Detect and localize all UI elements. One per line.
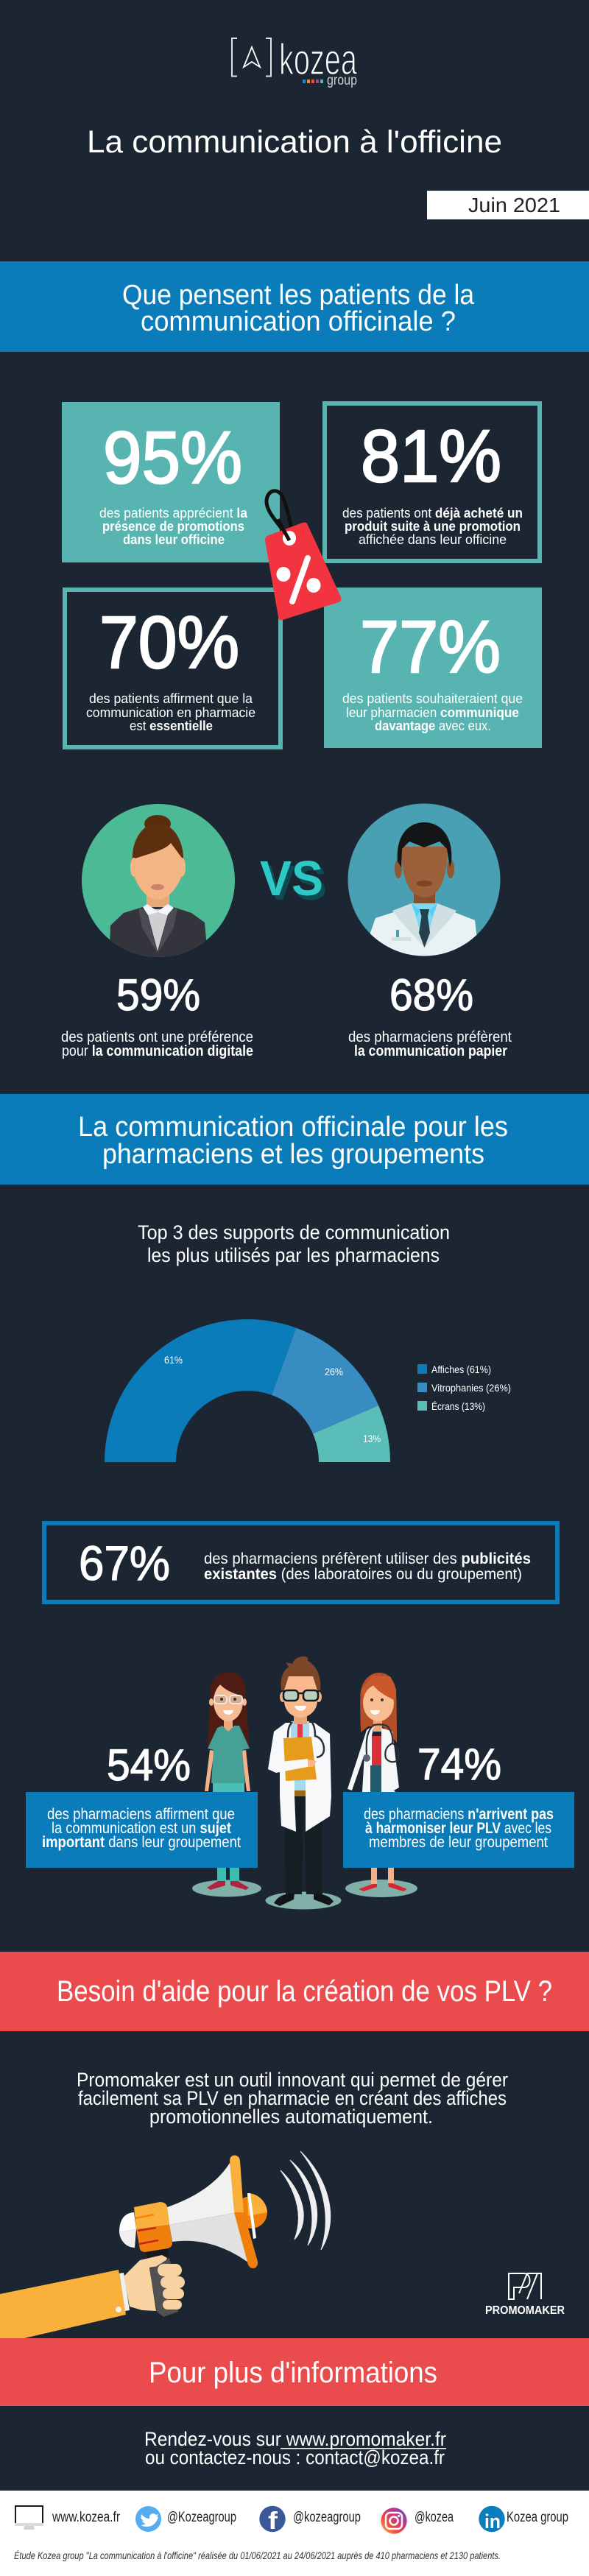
illustration: businesswoman avatar [82,804,235,964]
half donut chart: 61% [164,1354,183,1366]
section banner: pharmaciens et groupements: La communication officinale pour les [78,1112,508,1143]
text: contact details [144,2428,446,2469]
panel: 54% stat: des pharmaciens affirment que [47,1806,235,1823]
illustration: pharmacist avatar [348,804,501,964]
VS badge: VS [264,855,327,911]
icon: linkedin: in [484,2510,501,2533]
logo: Promomaker [485,2273,565,2317]
half donut chart: 26% [325,1366,343,1377]
panel: 70% stat: des patients affirment que la [89,691,253,706]
section banner: plus d'informations [0,2338,589,2406]
panel: 77% stat: davantage avec eux. [375,719,491,733]
icon: facebook [259,2506,286,2534]
logo: Kozea group [232,35,357,88]
panel: 54% stat: important dans leur groupement [42,1834,241,1851]
stat: 68% pharmaciens: la communication papier [354,1043,507,1059]
text: contact details: ou contactez-nous : contact@kozea.fr [145,2446,445,2469]
panel: 81% stat: affichée dans leur officine [359,532,507,547]
panel: 70% stat: communication en pharmacie [86,705,255,720]
panel: 54% stat [26,1740,258,1868]
chart legend: Écrans (13%) [431,1400,485,1412]
panel: 77% stat: leur pharmacien communique [346,705,519,720]
title: La communication à l'officine [87,124,502,160]
footer panel [0,2491,589,2576]
logo: Kozea group: kozea [279,35,357,84]
section banner: patients [0,261,589,352]
panel: 95% stat: présence de promotions [102,519,244,534]
illustration: woman in white coat [345,1673,417,1897]
link: linkedin handle: Kozea group [507,2510,568,2525]
panel: 74% stat: 74% [417,1740,501,1789]
panel: 81% stat: 81% [361,415,501,498]
icon: monitor [15,2506,43,2530]
panel: 70% stat: est essentielle [130,719,213,733]
panel: 81% stat: produit suite à une promotion [345,519,521,534]
illustration: woman in scrubs [192,1672,261,1896]
section banner: patients: communication officinale ? [141,306,456,337]
panel: 70% stat [65,590,281,747]
panel: 77% stat [324,587,542,748]
panel: 70% stat: 70% [99,601,239,684]
section banner: besoin d'aide [0,1952,589,2031]
chart legend: Affiches (61%) [431,1363,491,1375]
link: facebook handle: @kozeagroup [293,2510,361,2525]
text: Promomaker description: facilement sa PLV en pharmacie en créant des affiches [78,2087,507,2109]
panel: 77% stat: des patients souhaiteraient que [342,691,523,706]
text: contact details: Rendez-vous sur www.promomaker.fr [144,2428,446,2450]
icon: linkedin [479,2506,505,2533]
panel: 74% stat: membres de leur groupement [369,1834,548,1851]
panel: 54% stat: 54% [107,1740,191,1790]
stat: 68% pharmaciens: des pharmaciens préfèrent [348,1029,512,1045]
section banner: plus d'informations: Pour plus d'informations [149,2357,437,2389]
chart legend [417,1363,511,1412]
panel: 81% stat [325,403,540,561]
stat: 59% patients [61,970,253,1059]
icon: twitter [135,2506,161,2532]
chart legend: Vitrophanies (26%) [431,1382,511,1394]
panel: 81% stat: des patients ont déjà acheté un [342,506,523,521]
callout: 67% [44,1523,557,1602]
link: instagram handle: @kozea [415,2510,454,2525]
panel: 95% stat: dans leur officine [123,532,225,547]
illustration: male doctor [265,1656,342,1910]
section banner: patients: Que pensent les patients de la [122,280,475,311]
panel: 74% stat [343,1740,574,1868]
VS badge: VS [260,851,323,906]
link: website: www.kozea.fr [52,2510,121,2525]
half donut chart: 13% [363,1433,381,1444]
panel: 95% stat [62,402,280,562]
chart heading [138,1221,450,1266]
date badge [427,191,589,219]
stat: 59% patients: pour la communication digitale [62,1043,253,1059]
panel: 95% stat: des patients apprécient la [99,506,248,521]
panel: 95% stat: 95% [103,417,242,499]
stat: 59% patients: 59% [116,970,200,1020]
stat: 68% pharmaciens [348,970,512,1059]
icon: red price tag [265,491,341,620]
section banner: pharmaciens et groupements [0,1094,589,1185]
callout: 67%: 67% [79,1536,170,1590]
text: Promomaker description: Promomaker est un outil innovant qui permet de gérer [77,2069,508,2091]
panel: 54% stat: la communication est un sujet [52,1820,231,1837]
half donut chart [105,1319,390,1462]
icon: facebook: f [268,2507,278,2534]
section banner: pharmaciens et groupements: pharmaciens et les groupements [102,1139,484,1170]
stat: 68% pharmaciens: 68% [389,970,473,1020]
panel: 74% stat: à harmoniser leur PLV avec les [365,1820,551,1837]
callout: 67%: existantes (des laboratoires ou du groupement) [204,1566,522,1583]
text: Promomaker description [77,2069,508,2128]
stat: 59% patients: des patients ont une préférence [61,1029,253,1045]
link: twitter handle: @Kozeagroup [167,2510,236,2525]
date badge: Juin 2021 [468,194,560,216]
logo: Kozea group: group [327,73,357,88]
chart heading: Top 3 des supports de communication [138,1221,450,1243]
logo: Promomaker: PROMOMAKER [485,2304,565,2317]
illustration: megaphone and hand [0,2151,331,2338]
callout: 67%: des pharmaciens préfèrent utiliser des publicités [204,1550,531,1567]
text: Promomaker description: promotionnelles automatiquement. [149,2106,433,2128]
icon: instagram [381,2508,407,2534]
chart heading: les plus utilisés par les pharmaciens [147,1244,440,1266]
panel: 74% stat: des pharmaciens n'arrivent pas [364,1806,554,1823]
panel: 77% stat: 77% [360,606,501,688]
